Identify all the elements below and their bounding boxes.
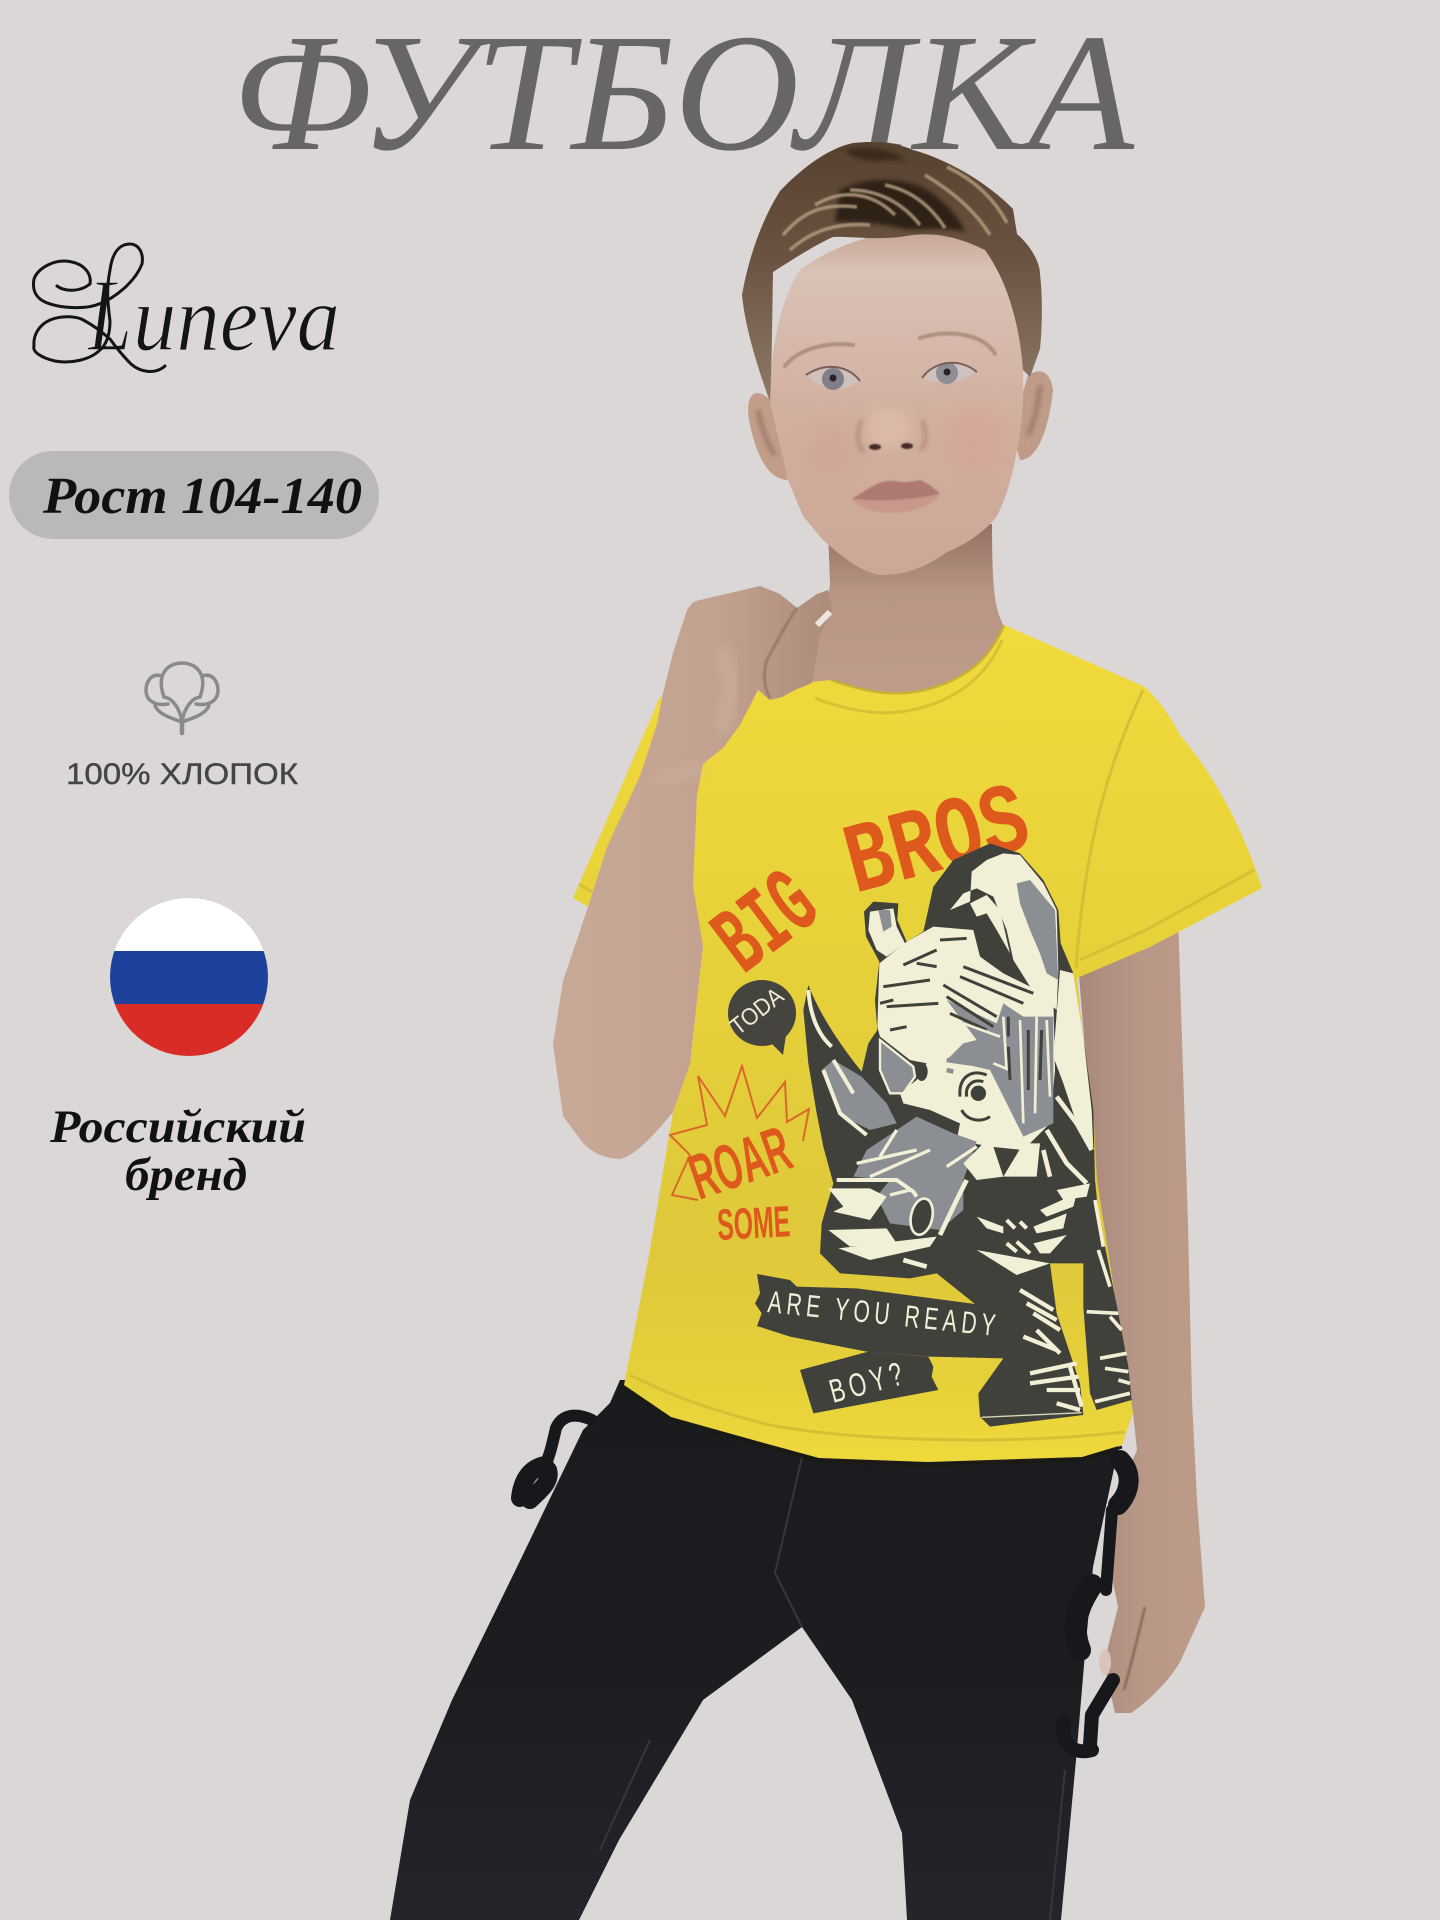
brand logo: Luneva: uneva <box>133 267 340 371</box>
collar band <box>815 640 1002 713</box>
brand logo: Luneva <box>33 244 340 373</box>
speech bubble: TODA <box>725 983 789 1041</box>
eye <box>956 1070 991 1120</box>
t-shirt print <box>670 766 1132 1427</box>
brand logo: Luneva: L <box>86 258 132 373</box>
trousers <box>390 1380 1120 1920</box>
hair <box>742 142 1042 402</box>
right arm and hand <box>1077 915 1205 1713</box>
lips <box>852 480 940 513</box>
gray skin folds <box>947 1000 1053 1137</box>
icon: russian flag circle <box>110 898 268 1057</box>
sleeve seams and hems <box>579 690 1254 1440</box>
snout gray <box>853 1117 977 1230</box>
neck <box>810 524 1010 720</box>
trouser seam <box>600 1457 1065 1920</box>
russian brand label: Российский <box>49 1101 306 1153</box>
ear <box>868 908 905 957</box>
print text: roar some: SOME <box>716 1197 791 1250</box>
label text <box>766 1284 1002 1410</box>
eyebrows <box>785 333 995 366</box>
russian brand label <box>49 1101 306 1201</box>
nostril <box>907 1197 936 1237</box>
russian brand label: бренд <box>125 1149 247 1201</box>
head cream <box>877 927 1055 1150</box>
print text: big bros <box>695 766 1042 998</box>
neck cream <box>963 1137 1040 1180</box>
small horn <box>880 1040 915 1093</box>
mouth stripes <box>828 1188 887 1220</box>
cotton label: 100% ХЛОПОК <box>66 758 299 791</box>
nose <box>858 408 926 452</box>
print text: big bros: BROS <box>834 766 1042 923</box>
print text: roar some: ROAR <box>680 1112 800 1213</box>
yellow t-shirt <box>573 625 1262 1465</box>
main horn <box>822 1060 897 1130</box>
forearm and hand raised to collar <box>553 586 832 1159</box>
title: ФУТБОЛКА <box>232 0 1135 186</box>
left waist lace <box>520 1416 592 1500</box>
print text: roar some <box>680 1112 800 1250</box>
print text: big bros: BIG <box>695 851 840 998</box>
eyes <box>806 362 977 390</box>
right waist lace <box>1063 1460 1129 1751</box>
label text: ARE YOU READY <box>766 1284 1002 1343</box>
height range pill: Рост 104-140 <box>42 468 362 525</box>
forehead wrinkles <box>880 938 1033 1030</box>
ears <box>748 371 1053 480</box>
flank cream <box>1053 970 1093 1150</box>
boy model wearing the t-shirt <box>390 142 1262 1920</box>
front leg hatching <box>1020 1290 1082 1410</box>
face <box>770 231 1023 575</box>
rear leg hatching <box>1087 1200 1130 1402</box>
icon: cotton boll <box>146 663 218 733</box>
neck folds <box>977 1183 1090 1275</box>
orange burst <box>670 1066 809 1200</box>
hump cream <box>950 853 1058 1010</box>
height range pill <box>9 451 379 539</box>
boy label band <box>800 1352 938 1413</box>
label text: BOY? <box>825 1353 911 1410</box>
rhino graphic <box>755 843 1132 1427</box>
